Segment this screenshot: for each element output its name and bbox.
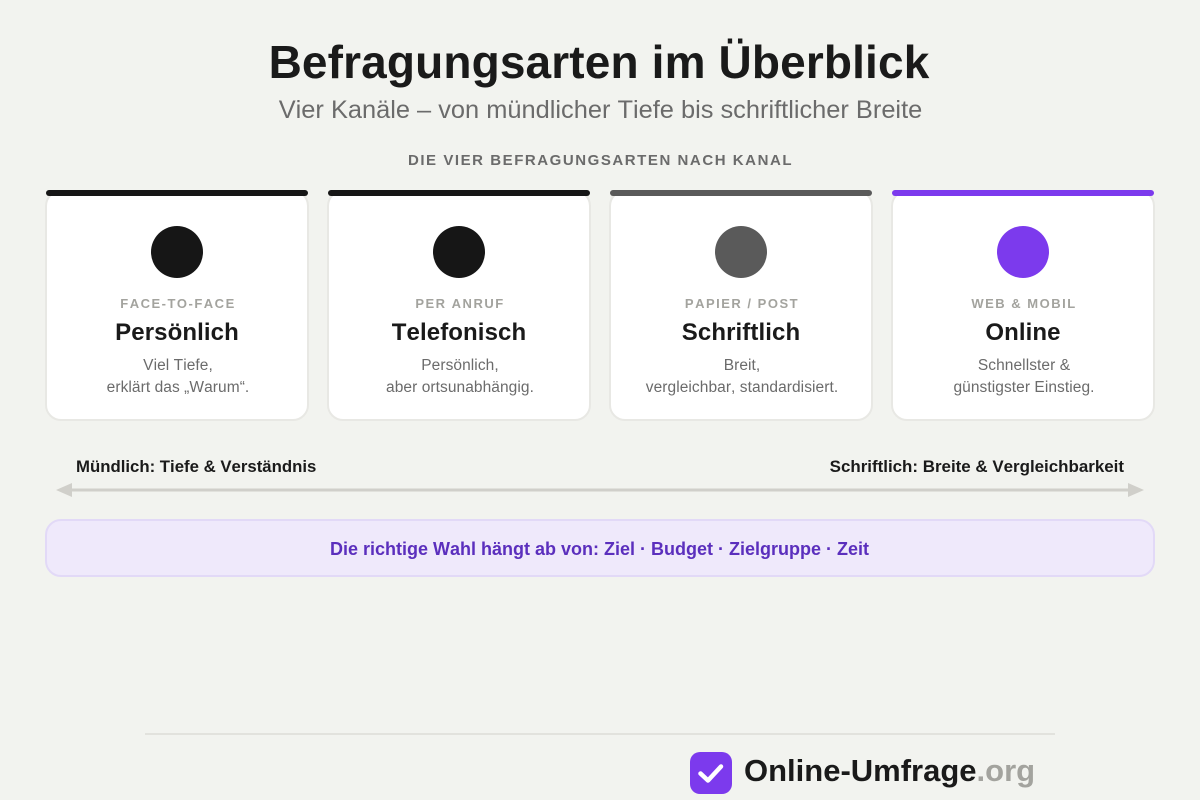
- subtitle: Vier Kanäle – von mündlicher Tiefe bis schriftlicher Breite: [279, 96, 922, 124]
- logo wordmark: Online-Umfrage.org: [744, 753, 1035, 788]
- panel: Schriftlich: vergleichbar, standardisiert.: [646, 379, 838, 396]
- panel: Telefonisch: aber ortsunabhängig.: [386, 379, 534, 396]
- panel: Persönlich: FACE-TO-FACE: [120, 296, 236, 311]
- panel: Online: günstigster Einstieg.: [953, 379, 1095, 396]
- callout text: Die richtige Wahl hängt ab von: Ziel · Budget · Zielgruppe · Zeit: [330, 539, 869, 559]
- arrow: double-headed spectrum: [56, 483, 1144, 497]
- panel: Persönlich: Persönlich: [115, 319, 239, 346]
- panel: Online: Schnellster &: [978, 357, 1070, 374]
- panel: Online: Online: [985, 319, 1061, 346]
- panel: Telefonisch: Telefonisch: [392, 319, 526, 346]
- panel: Schriftlich: Breit,: [724, 357, 760, 374]
- spectrum label right: Schriftlich: Breite & Vergleichbarkeit: [830, 457, 1124, 476]
- title: Befragungsarten im Überblick: [269, 36, 929, 88]
- callout: [45, 519, 1155, 577]
- panel: Telefonisch: [327, 190, 591, 421]
- panel: Persönlich: [45, 190, 309, 421]
- spectrum label left: Mündlich: Tiefe & Verständnis: [76, 457, 316, 476]
- panel: Online: WEB & MOBIL: [971, 296, 1077, 311]
- panel: Schriftlich: Schriftlich: [682, 319, 800, 346]
- footer divider: [145, 733, 1055, 735]
- panel: Persönlich: Viel Tiefe,: [143, 357, 213, 374]
- panel: Schriftlich: [609, 190, 873, 421]
- panel: Telefonisch: PER ANRUF: [415, 296, 505, 311]
- panel: Telefonisch: Persönlich,: [421, 357, 499, 374]
- icon: logo checkmark: [690, 752, 732, 794]
- panel: Online: [891, 190, 1155, 421]
- panel: Persönlich: erklärt das „Warum“.: [107, 379, 249, 396]
- section label: DIE VIER BEFRAGUNGSARTEN NACH KANAL: [408, 152, 793, 169]
- panel: Schriftlich: PAPIER / POST: [685, 296, 799, 311]
